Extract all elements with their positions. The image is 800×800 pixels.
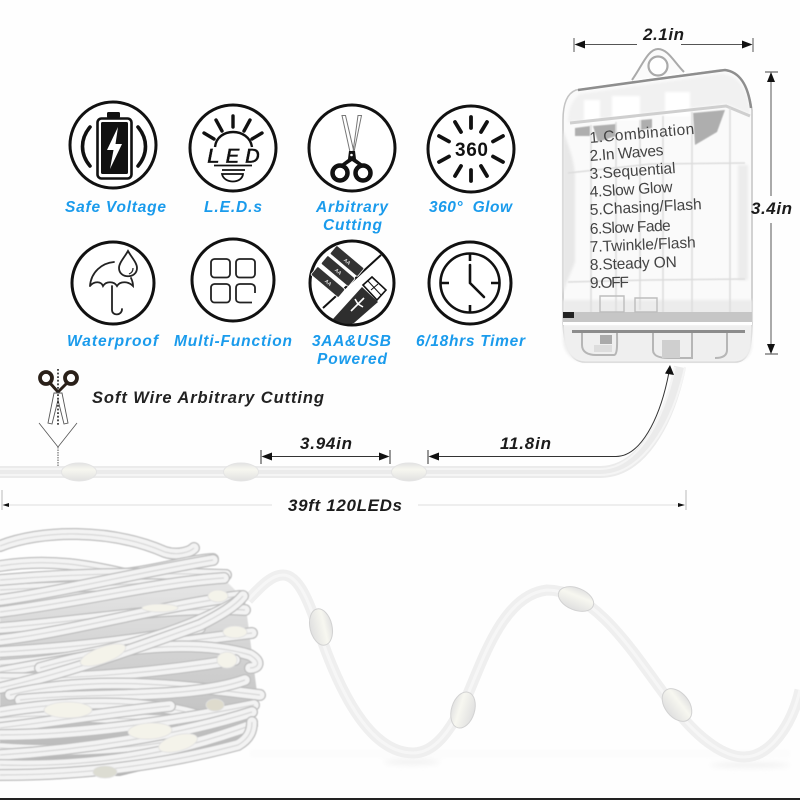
box body	[563, 70, 752, 362]
icon: 360 glow: 360	[455, 140, 488, 161]
dimension: box width	[574, 25, 753, 52]
coil wires	[0, 534, 260, 775]
mode list: 6.Slow Fade	[589, 217, 671, 238]
coil LEDs	[44, 590, 247, 778]
mode list	[589, 121, 702, 292]
dimension: total length	[2, 490, 686, 515]
floor shadow	[250, 752, 790, 767]
box hanging loop	[632, 49, 684, 80]
coiled wire	[0, 534, 260, 778]
label: arbitrary cutting: Cutting	[323, 217, 383, 234]
icon: multi-function	[192, 239, 274, 321]
icon: batteries and USB	[310, 241, 394, 325]
icon: 360 glow	[428, 106, 514, 192]
label: 360 glow: 360° Glow	[429, 199, 513, 216]
mode list: 4.Slow Glow	[589, 179, 674, 201]
heading: soft wire cutting: Soft Wire Arbitrary Cutting	[92, 389, 324, 407]
box shading	[563, 74, 752, 362]
icon: LED	[190, 105, 276, 191]
cut marker: scissors	[39, 369, 77, 472]
label: 3AA and USB powered: Powered	[317, 351, 388, 368]
icon: waterproof	[72, 242, 154, 324]
bottom edge	[0, 798, 800, 800]
mode list: 9.OFF	[590, 274, 629, 292]
dimension: 11.800in: 11.8in	[500, 434, 551, 453]
icon: timer clock	[429, 242, 511, 324]
mode list: 2.In Waves	[589, 142, 664, 165]
mode list: 7.Twinkle/Flash	[589, 234, 696, 256]
dimension: 3.94in	[261, 434, 390, 464]
label: arbitrary cutting: Arbitrary	[315, 199, 389, 216]
mode list: 5.Chasing/Flash	[589, 196, 702, 219]
dimension: 3.94in: 3.94in	[300, 434, 352, 453]
label: 3AA and USB powered	[312, 333, 391, 368]
battery box with mode list	[563, 49, 752, 362]
label: safe voltage: Safe Voltage	[65, 199, 166, 216]
icon: safe voltage	[70, 102, 156, 188]
label: timer: 6/18hrs Timer	[416, 333, 526, 350]
mode list: 3.Sequential	[589, 160, 676, 183]
icon: batteries and USB: AA	[333, 268, 343, 277]
dimension: 11.800in	[428, 365, 674, 464]
icon: batteries and USB: AA	[323, 279, 333, 288]
label: 3AA and USB powered: 3AA&USB	[312, 333, 391, 350]
dimension: box width: 2.1in	[642, 25, 684, 44]
mode list: 8.Steady ON	[590, 254, 677, 274]
label: LEDs: L.E.D.s	[204, 199, 262, 216]
coil shadow mass	[0, 578, 258, 776]
dimension: total length: 39ft 120LEDs	[288, 496, 402, 515]
mode list: 1.Combination	[589, 121, 695, 147]
label: waterproof: Waterproof	[67, 333, 160, 350]
label: multi-function: Multi-Function	[174, 333, 292, 350]
flat wire with LEDs	[0, 367, 685, 481]
icon: scissors	[309, 105, 395, 191]
wavy wire with LEDs	[248, 575, 800, 757]
dimension: box height: 3.4in	[751, 199, 792, 218]
dimension: box height	[751, 72, 792, 354]
icon: LED: LED	[207, 145, 260, 168]
icon: batteries and USB: AA	[342, 258, 352, 267]
label: arbitrary cutting	[315, 199, 389, 234]
